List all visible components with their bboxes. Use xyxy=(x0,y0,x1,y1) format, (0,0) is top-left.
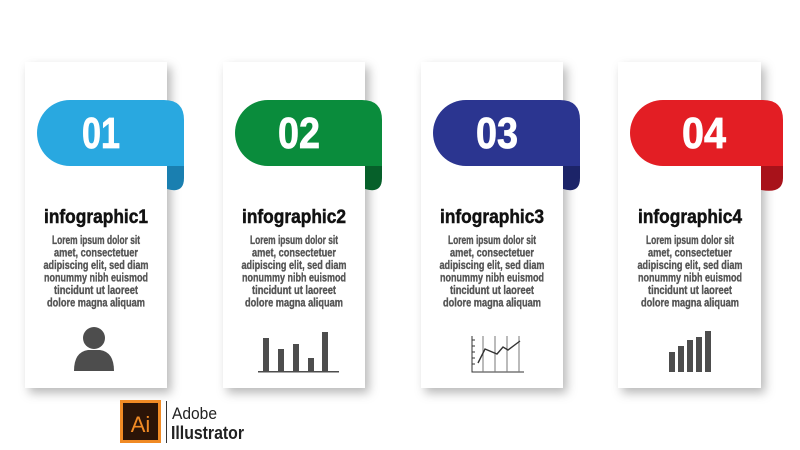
icon: person xyxy=(74,327,114,371)
body text 1: tincidunt ut laoreet xyxy=(54,285,138,297)
card 2 xyxy=(223,62,382,388)
body text 3: amet, consectetuer xyxy=(450,248,534,260)
body text 3: adipiscing elit, sed diam xyxy=(440,260,544,272)
body text 1: nonummy nibh euismod xyxy=(44,272,148,284)
title 4: infographic4 xyxy=(638,207,742,228)
title 1: infographic1 xyxy=(44,207,148,228)
ribbon 04: 04 xyxy=(682,109,726,158)
body text 2 xyxy=(242,235,346,310)
body text 2: nonummy nibh euismod xyxy=(242,272,346,284)
body text 3: tincidunt ut laoreet xyxy=(450,285,534,297)
body text 3: Lorem ipsum dolor sit xyxy=(448,235,536,247)
body text 1: Lorem ipsum dolor sit xyxy=(52,235,140,247)
logo: Adobe Illustrator: Illustrator xyxy=(171,423,244,443)
body text 4: nonummy nibh euismod xyxy=(638,272,742,284)
body text 3: dolore magna aliquam xyxy=(443,298,541,310)
body text 4 xyxy=(638,235,742,310)
card 4 xyxy=(618,62,783,388)
title 2: infographic2 xyxy=(242,207,346,228)
body text 1: adipiscing elit, sed diam xyxy=(44,260,148,272)
body text 1: dolore magna aliquam xyxy=(47,298,145,310)
body text 3 xyxy=(440,235,544,310)
ribbon 04 xyxy=(630,100,783,191)
body text 2: dolore magna aliquam xyxy=(245,298,343,310)
logo: Adobe Illustrator: Adobe xyxy=(172,404,217,423)
body text 4: Lorem ipsum dolor sit xyxy=(646,235,734,247)
ribbon 01 xyxy=(37,100,184,190)
body text 4: dolore magna aliquam xyxy=(641,298,739,310)
icon: ascending bars xyxy=(669,331,711,372)
ribbon 03: 03 xyxy=(476,109,518,158)
body text 4: adipiscing elit, sed diam xyxy=(638,260,742,272)
card 3 xyxy=(421,62,580,388)
body text 1: amet, consectetuer xyxy=(54,248,138,260)
logo: Adobe Illustrator: Ai xyxy=(131,412,150,437)
icon: bar chart xyxy=(258,332,339,372)
ribbon 02: 02 xyxy=(278,109,320,158)
body text 2: adipiscing elit, sed diam xyxy=(242,260,346,272)
body text 2: tincidunt ut laoreet xyxy=(252,285,336,297)
icon: line chart xyxy=(472,336,524,372)
body text 2: amet, consectetuer xyxy=(252,248,336,260)
body text 4: tincidunt ut laoreet xyxy=(648,285,732,297)
ribbon 02 xyxy=(235,100,382,190)
body text 1 xyxy=(44,235,148,310)
body text 4: amet, consectetuer xyxy=(648,248,732,260)
body text 3: nonummy nibh euismod xyxy=(440,272,544,284)
ribbon 01: 01 xyxy=(82,109,120,158)
title 3: infographic3 xyxy=(440,207,544,228)
ribbon 03 xyxy=(433,100,580,190)
card 1 xyxy=(25,62,184,388)
body text 2: Lorem ipsum dolor sit xyxy=(250,235,338,247)
logo: Adobe Illustrator xyxy=(120,400,244,443)
